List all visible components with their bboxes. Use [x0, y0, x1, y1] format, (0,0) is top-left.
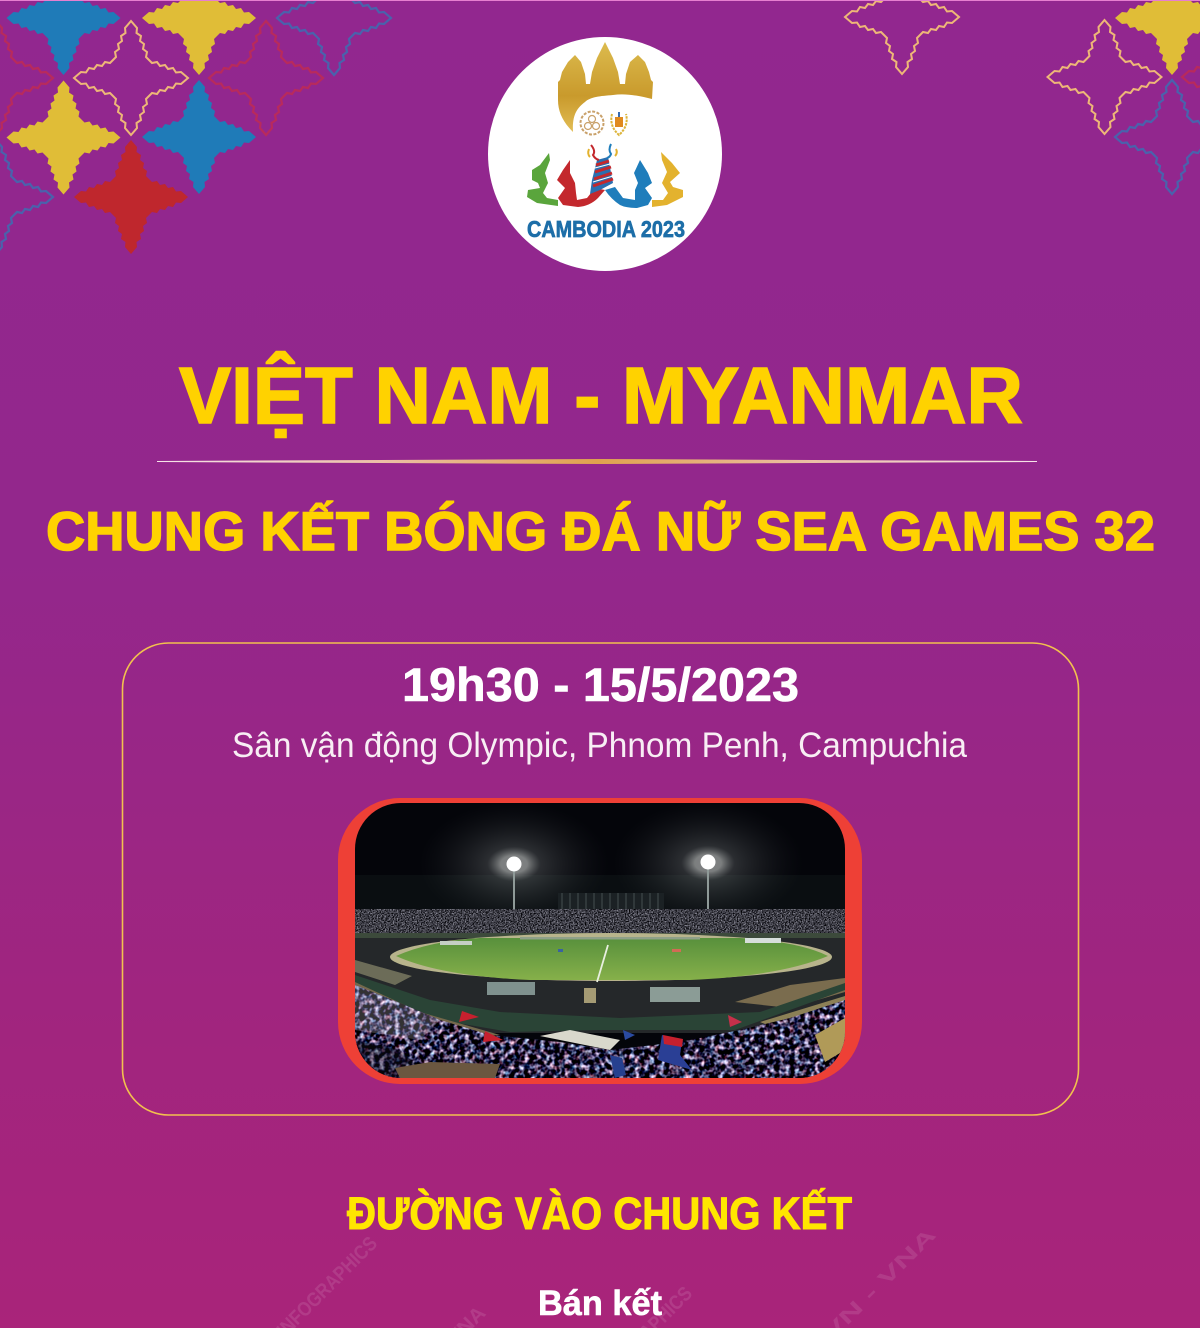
pitch advertising and goals: [440, 937, 781, 952]
far stand crowd: [355, 909, 845, 934]
match time: 19h30 - 15/5/2023: [402, 658, 799, 711]
panel: match details: [122, 643, 1078, 1115]
subtitle: CHUNG KẾT BÓNG ĐÁ NỮ SEA GAMES 32: [46, 500, 1155, 562]
track: [355, 933, 845, 1033]
logo wordmark: CAMBODIA 2023: [527, 216, 685, 242]
top-right star ornaments: [845, 0, 1200, 194]
pitch: [390, 933, 832, 981]
section heading: ĐƯỜNG VÀO CHUNG KẾT: [347, 1188, 852, 1239]
stadium photo: [338, 798, 862, 1084]
photo frame: [338, 798, 862, 1084]
logo central tower: [588, 144, 617, 194]
dugouts: [487, 982, 700, 1003]
watermarks: [273, 1224, 941, 1328]
sand strips: [355, 960, 845, 1008]
scoreboard structure: [558, 893, 664, 910]
top edge highlight: [0, 0, 1200, 1]
match venue: Sân vận động Olympic, Phnom Penh, Campuchia: [232, 726, 968, 765]
logo seals: [580, 112, 627, 135]
logo naga: yellow: [652, 152, 683, 207]
near ground patches: [395, 1018, 845, 1078]
logo crown: [558, 42, 653, 132]
logo naga: red: [557, 160, 605, 207]
semifinal label: Bán kết: [538, 1284, 662, 1323]
panel frame: [122, 643, 1078, 1115]
photo scene: [355, 801, 845, 1078]
logo: Cambodia 2023 SEA Games: [488, 37, 722, 271]
logo naga: green: [527, 153, 558, 206]
logo naga: blue: [605, 160, 652, 208]
near track apron and fence: [355, 975, 845, 1040]
near stand crowd: [355, 980, 845, 1078]
divider rule: [157, 459, 1037, 464]
floodlight glow: [442, 816, 779, 909]
flags: [459, 1011, 742, 1078]
top-left star ornaments: [0, 0, 391, 254]
title: VIỆT NAM - MYANMAR: [179, 351, 1023, 440]
